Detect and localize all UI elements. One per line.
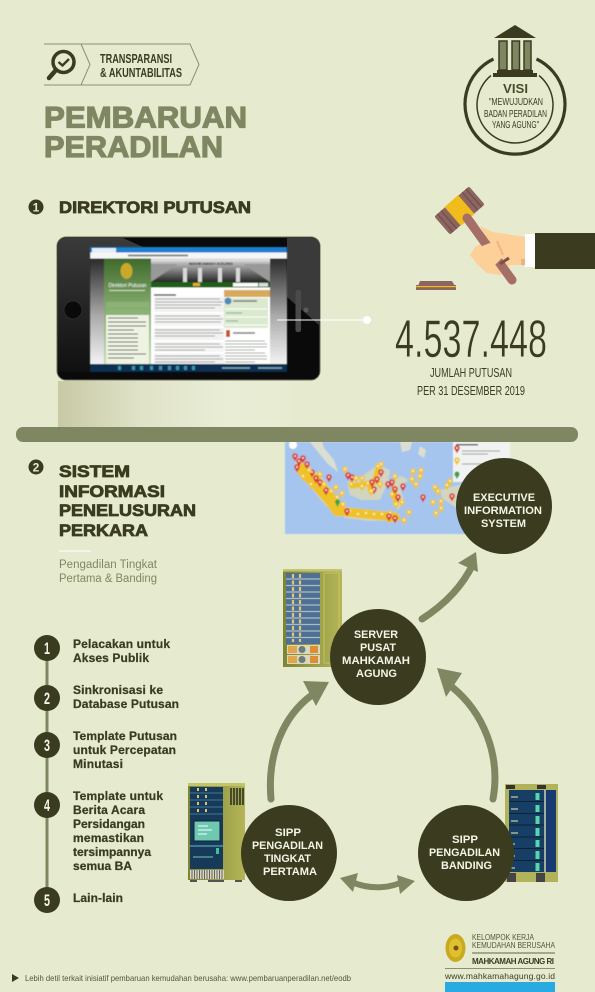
item 3: Template Putusan: [73, 729, 177, 743]
title: [44, 102, 247, 164]
connector line: [277, 316, 371, 324]
server rack: pengadilan tingkat pertama: [188, 783, 245, 881]
icon: magnifier with check: [49, 52, 74, 78]
node: server pusat mahkamah agung: SERVER: [354, 629, 398, 641]
node: executive information system: [456, 458, 552, 554]
arrow: pusat to executive: [422, 552, 478, 619]
website screenshot: [90, 247, 287, 372]
gavel block: [416, 281, 456, 290]
item 3: untuk Percepatan: [73, 743, 176, 757]
item 5: [34, 887, 123, 913]
heading: sistem informasi penelusuran perkara: 2: [33, 460, 40, 474]
item 5: 5: [44, 891, 50, 910]
visi emblem: YANG AGUNG": [492, 119, 539, 131]
node: sipp pengadilan tingkat pertama: PERTAMA: [263, 866, 317, 878]
heading: sistem informasi penelusuran perkara: SISTEM: [59, 462, 130, 481]
visi emblem: "MEWUJUDKAN: [489, 96, 543, 108]
subheading: pengadilan tingkat pertama & banding: Pengadilan Tingkat: [59, 559, 158, 571]
heading: direktori putusan: 1: [33, 200, 40, 214]
item 2: Database Putusan: [73, 697, 179, 711]
subheading: pengadilan tingkat pertama & banding: Pertama & Banding: [59, 573, 157, 585]
heading: sistem informasi penelusuran perkara: PERKARA: [59, 521, 148, 540]
map of Indonesia: [285, 441, 510, 534]
footer logo block: www.mahkamahagung.go.id: [444, 971, 555, 981]
statistic: jumlah putusan: JUMLAH PUTUSAN: [430, 366, 512, 380]
node: sipp pengadilan banding: BANDING: [441, 860, 492, 872]
node: sipp pengadilan banding: [418, 805, 514, 901]
node: executive information system: SYSTEM: [481, 518, 526, 530]
footer logo block: [444, 932, 555, 992]
footer logo block: MAHKAMAH AGUNG RI: [472, 957, 554, 966]
icon: hand with gavel: [416, 186, 595, 290]
item 2: Sinkronisasi ke: [73, 683, 163, 697]
website screenshot: MAHKAMAH AGUNG: [189, 262, 233, 266]
item 2: 2: [44, 689, 50, 708]
item 3: [34, 729, 177, 771]
tag: transparansi & akuntabilitas: [44, 44, 199, 85]
node: sipp pengadilan banding: PENGADILAN: [429, 847, 500, 859]
node: server pusat mahkamah agung: [330, 609, 426, 705]
item 4: Template untuk: [73, 789, 163, 803]
footer logo block: KELOMPOK KERJA: [472, 932, 534, 942]
arrow: pertama and banding exchange: [340, 873, 415, 894]
item 4: [34, 789, 163, 873]
item 4: tersimpannya: [73, 845, 151, 859]
website screenshot: Direktori Putusan: [108, 283, 146, 289]
item 1: Akses Publik: [73, 651, 149, 665]
item 1: Pelacakan untuk: [73, 637, 170, 651]
node: sipp pengadilan tingkat pertama: [241, 805, 337, 901]
heading: sistem informasi penelusuran perkara: INFORMASI: [59, 482, 165, 501]
node: server pusat mahkamah agung: PUSAT: [360, 642, 396, 654]
pedestal: [58, 381, 298, 427]
node: sipp pengadilan tingkat pertama: TINGKAT: [264, 853, 311, 865]
divider bar: [16, 427, 578, 442]
item 1: [34, 635, 170, 665]
item 4: 4: [44, 796, 50, 815]
footer logo block: KEMUDAHAN BERUSAHA: [472, 940, 555, 950]
item 3: 3: [44, 736, 50, 755]
statistic: jumlah putusan: [395, 310, 547, 398]
heading: direktori putusan: DIREKTORI PUTUSAN: [59, 198, 251, 217]
footer note: Lebih detil terkait inisiatif pembaruan kemudahan berusaha: www.pembaruanperadilan.net/eodb: [25, 973, 351, 983]
item 2: [34, 683, 179, 711]
item 5: Lain-lain: [73, 891, 123, 905]
visi emblem: [465, 25, 565, 154]
subheading: pengadilan tingkat pertama & banding: [59, 551, 158, 585]
node: sipp pengadilan tingkat pertama: SIPP: [275, 827, 301, 839]
node: sipp pengadilan banding: SIPP: [452, 834, 478, 846]
item 4: Persidangan: [73, 817, 145, 831]
item 4: semua BA: [73, 859, 132, 873]
server rack: pengadilan banding: [505, 784, 558, 882]
item 4: Berita Acara: [73, 803, 145, 817]
item 4: memastikan: [73, 831, 144, 845]
arrows between nodes: [270, 552, 495, 894]
tag: transparansi & akuntabilitas: & AKUNTABILITAS: [100, 65, 182, 80]
icon: mahkamah agung emblem: [446, 934, 466, 962]
node: server pusat mahkamah agung: MAHKAMAH: [342, 655, 410, 667]
tablet with website screenshot: [57, 237, 320, 380]
node: server pusat mahkamah agung: AGUNG: [356, 668, 397, 680]
item 1: 1: [44, 639, 50, 658]
numbered list: [34, 635, 179, 913]
tag: transparansi & akuntabilitas: TRANSPARANSI: [100, 51, 172, 66]
node: executive information system: INFORMATION: [464, 505, 542, 517]
sleeve: [525, 234, 535, 267]
item 3: Minutasi: [73, 757, 123, 771]
arrow: pertama to pusat: [270, 681, 329, 799]
title: PEMBARUAN: [44, 102, 247, 134]
heading: sistem informasi penelusuran perkara: PENELUSURAN: [59, 501, 196, 520]
server rack: pusat: [283, 569, 342, 667]
statistic: jumlah putusan: PER 31 DESEMBER 2019: [417, 384, 525, 398]
map legend: [453, 442, 510, 482]
node: sipp pengadilan tingkat pertama: PENGADILAN: [252, 840, 323, 852]
visi emblem: VISI: [503, 81, 528, 96]
icon: home button: [64, 301, 82, 319]
arrow: banding to pusat: [437, 668, 495, 799]
visi emblem: BADAN PERADILAN: [484, 108, 547, 120]
node: executive information system: EXECUTIVE: [473, 492, 535, 504]
heading: sistem informasi penelusuran perkara: [28, 460, 196, 540]
title: PERADILAN: [44, 131, 223, 164]
